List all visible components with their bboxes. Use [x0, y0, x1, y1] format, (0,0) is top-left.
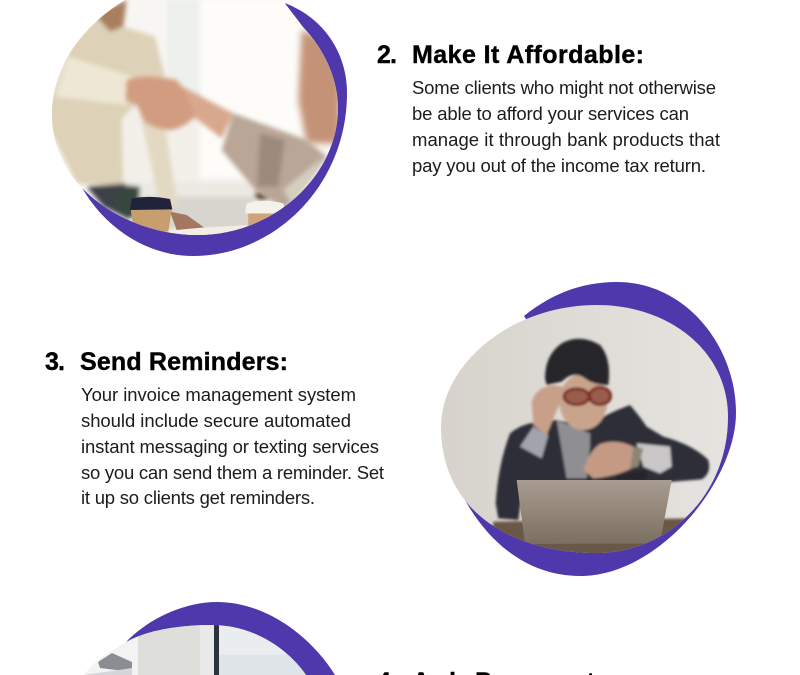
text block: step 3 body: it up so clients get reminders. — [81, 487, 315, 508]
heading: step 2: Make It Affordable: — [412, 41, 644, 69]
text block: step 3 body — [81, 384, 384, 508]
text block: step 2 body: Some clients who might not otherwise — [412, 77, 716, 98]
text block: step 2 body: manage it through bank products that — [412, 129, 720, 150]
heading: step 3: 3. — [45, 348, 65, 376]
text block: step 2 body: pay you out of the income tax return. — [412, 155, 706, 176]
text block: step 3 body: so you can send them a reminder. Set — [81, 462, 384, 483]
text block: step 3 body: should include secure automated — [81, 410, 351, 431]
heading: step 2: 2. — [377, 41, 397, 69]
purple blob behind office photo — [100, 602, 335, 675]
text block: step 2 body: be able to afford your services can — [412, 103, 689, 124]
man checking watch photo — [436, 300, 736, 563]
text block: step 2 body — [412, 77, 720, 176]
panel: step 2 photo — [40, 0, 350, 256]
text block: step 3 body: instant messaging or texting services — [81, 436, 379, 457]
handshake photo — [40, 0, 350, 240]
purple blob behind handshake photo — [78, 0, 347, 256]
heading: step 3: Send Reminders: — [80, 348, 288, 376]
office photo — [84, 625, 306, 675]
panel: step 3 photo — [436, 282, 736, 576]
panel: step 4 photo, cropped by page edge — [60, 602, 335, 675]
purple blob behind man photo — [465, 282, 736, 576]
text block: step 3 body: Your invoice management system — [81, 384, 356, 405]
